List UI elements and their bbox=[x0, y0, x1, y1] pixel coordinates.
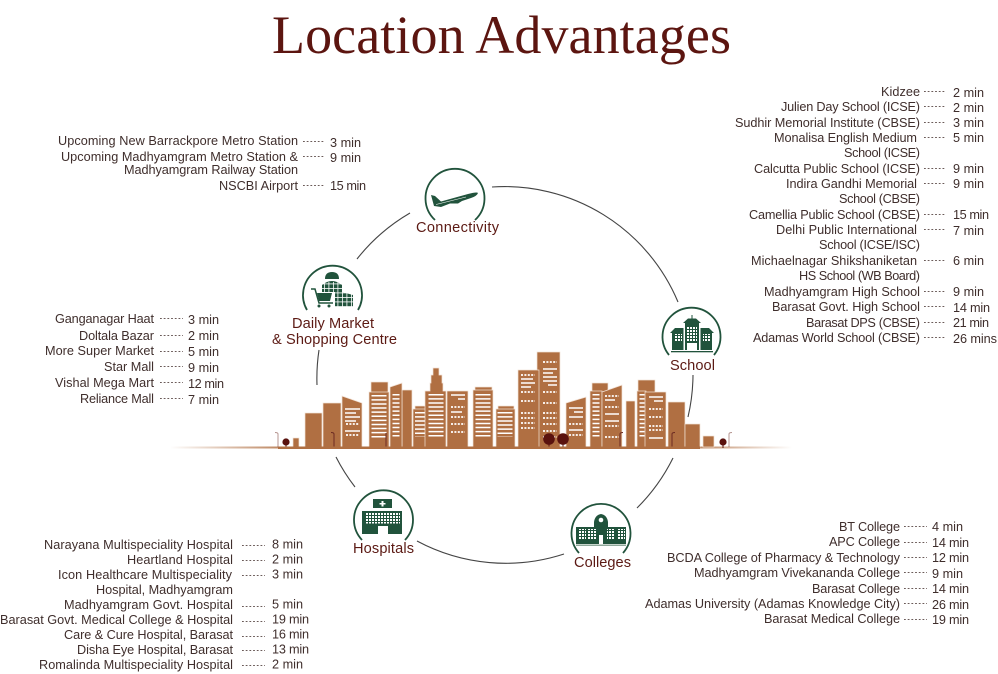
row: indira gandhi: Indira Gandhi Memorial bbox=[786, 177, 917, 191]
row: vivekananda: 9 min bbox=[932, 567, 963, 581]
right buildings bbox=[566, 380, 714, 447]
row: reliance mall bbox=[80, 392, 219, 407]
row: barasat medical: 19 min bbox=[272, 612, 309, 626]
icon: airplane bbox=[431, 192, 478, 207]
ring connectors bbox=[317, 187, 693, 563]
row: adamas university: Adamas University (Adamas Knowledge City) bbox=[645, 597, 900, 611]
row: romalinda: 2 min bbox=[272, 658, 303, 672]
row: delhi public: Delhi Public International bbox=[776, 223, 917, 237]
row: madhyamgram govt bbox=[64, 598, 303, 612]
row: bt college bbox=[839, 520, 963, 534]
row: ganganagar haat bbox=[55, 312, 219, 327]
row: doltala bazar: 2 min bbox=[188, 329, 219, 343]
row: apc college: APC College bbox=[829, 535, 900, 549]
row: care and cure: Care & Cure Hospital, Barasat bbox=[64, 628, 233, 642]
row: monalisa: School (ICSE) bbox=[844, 146, 920, 160]
row: madhyamgram high: 9 min bbox=[953, 285, 984, 299]
row: barasat college: 14 min bbox=[932, 582, 969, 596]
row: barasat medical college: 19 min bbox=[932, 613, 969, 627]
label: Connectivity bbox=[416, 220, 500, 236]
row: ganganagar haat: 3 min bbox=[188, 313, 219, 327]
row: madhyamgram metro: Upcoming Madhyamgram Metro Station & bbox=[61, 150, 299, 164]
row: new barrackpore metro: 3 min bbox=[330, 136, 361, 150]
row: calcutta public: 9 min bbox=[953, 162, 984, 176]
row: disha eye: Disha Eye Hospital, Barasat bbox=[77, 643, 233, 657]
icon: school building bbox=[670, 315, 714, 352]
row: delhi public bbox=[776, 223, 984, 252]
icon ring bbox=[662, 308, 720, 355]
row: michaelnagar: 6 min bbox=[953, 254, 984, 268]
row: monalisa: Monalisa English Medium bbox=[774, 131, 917, 145]
row: sudhir memorial: Sudhir Memorial Institute (CBSE) bbox=[735, 116, 920, 130]
row: heartland: 2 min bbox=[272, 552, 303, 566]
list: college distances bbox=[645, 520, 969, 627]
row: indira gandhi: 9 min bbox=[953, 177, 984, 191]
street lamps bbox=[275, 432, 732, 447]
list: hospital distances bbox=[0, 538, 309, 672]
centre towers bbox=[518, 352, 560, 447]
label: Colleges bbox=[574, 555, 631, 571]
row: more super market bbox=[45, 344, 219, 359]
row: adamas world: Adamas World School (CBSE) bbox=[753, 331, 920, 345]
row: airport bbox=[219, 179, 366, 193]
title: Location Advantages bbox=[272, 5, 731, 65]
icon: hospital building bbox=[362, 499, 402, 534]
ground band bbox=[278, 446, 700, 449]
row: barasat medical college bbox=[764, 612, 969, 627]
row: monalisa: 5 min bbox=[953, 131, 984, 145]
row: doltala bazar: Doltala Bazar bbox=[79, 329, 155, 343]
row: bcda college: BCDA College of Pharmacy & Technology bbox=[667, 551, 901, 565]
row: apc college: 14 min bbox=[932, 536, 969, 550]
row: madhyamgram metro: Madhyamgram Railway Station bbox=[124, 163, 298, 177]
row: bt college: BT College bbox=[839, 520, 900, 534]
row: barasat dps bbox=[806, 316, 989, 330]
row: vishal mega mart: 12 min bbox=[188, 377, 224, 391]
row: vishal mega mart bbox=[55, 376, 224, 391]
icon: college building bbox=[576, 514, 626, 546]
row: star mall: Star Mall bbox=[104, 360, 154, 374]
row: barasat dps: 21 min bbox=[953, 316, 989, 330]
list: connectivity distances bbox=[58, 134, 366, 193]
row: new barrackpore metro bbox=[58, 134, 361, 150]
row: reliance mall: Reliance Mall bbox=[80, 392, 154, 406]
node: hospitals bbox=[353, 490, 414, 557]
row: star mall: 9 min bbox=[188, 361, 219, 375]
row: narayana: 8 min bbox=[272, 538, 303, 552]
row: icon healthcare bbox=[58, 568, 303, 597]
row: camellia: 15 min bbox=[953, 208, 989, 222]
label: School bbox=[670, 358, 715, 374]
row: barasat govt high: Barasat Govt. High School bbox=[772, 300, 920, 314]
icon ring bbox=[572, 504, 631, 553]
node: daily market bbox=[272, 266, 397, 348]
row: madhyamgram high: Madhyamgram High School bbox=[764, 285, 920, 299]
row: more super market: 5 min bbox=[188, 345, 219, 359]
list: school distances bbox=[735, 85, 997, 346]
row: madhyamgram govt: Madhyamgram Govt. Hospital bbox=[64, 598, 233, 612]
row: icon healthcare: 3 min bbox=[272, 568, 303, 582]
row: bcda college: 12 min bbox=[932, 551, 969, 565]
row: madhyamgram metro: 9 min bbox=[330, 151, 361, 165]
icon ring bbox=[354, 490, 413, 540]
row: barasat college: Barasat College bbox=[812, 582, 900, 596]
row: madhyamgram metro bbox=[61, 150, 361, 177]
row: airport: NSCBI Airport bbox=[219, 179, 298, 193]
row: indira gandhi bbox=[786, 177, 984, 206]
row: icon healthcare: Icon Healthcare Multispeciality bbox=[58, 568, 233, 582]
row: narayana: Narayana Multispeciality Hospital bbox=[44, 538, 233, 552]
list: daily market distances bbox=[45, 312, 224, 407]
row: care and cure: 16 min bbox=[272, 628, 309, 642]
icon ring bbox=[303, 266, 362, 310]
label: Hospitals bbox=[353, 541, 414, 557]
row: delhi public: School (ICSE/ISC) bbox=[819, 238, 920, 252]
node: colleges bbox=[572, 504, 631, 571]
label: Daily Market bbox=[292, 316, 374, 332]
row: indira gandhi: School (CBSE) bbox=[839, 192, 920, 206]
city skyline bbox=[170, 352, 792, 449]
row: heartland bbox=[127, 552, 303, 567]
icon ring bbox=[426, 169, 484, 220]
row: heartland: Heartland Hospital bbox=[127, 553, 233, 567]
row: julien day bbox=[781, 100, 984, 115]
row: barasat govt high bbox=[772, 300, 990, 315]
row: michaelnagar: Michaelnagar Shikshaniketan bbox=[751, 254, 917, 268]
row: sudhir memorial: 3 min bbox=[953, 116, 984, 130]
row: barasat medical college: Barasat Medical College bbox=[764, 612, 900, 626]
row: disha eye: 13 min bbox=[272, 642, 309, 656]
icon: shopping mall and cart bbox=[310, 272, 353, 308]
row: apc college bbox=[829, 535, 969, 550]
left buildings bbox=[293, 368, 515, 447]
row: doltala bazar bbox=[79, 329, 219, 343]
row: adamas world: 26 mins bbox=[953, 332, 997, 346]
row: romalinda: Romalinda Multispeciality Hospital bbox=[39, 658, 233, 672]
row: barasat medical: Barasat Govt. Medical College & Hospital bbox=[0, 613, 233, 627]
row: bt college: 4 min bbox=[932, 520, 963, 534]
row: julien day: Julien Day School (ICSE) bbox=[781, 100, 920, 114]
row: airport: 15 min bbox=[330, 179, 366, 193]
row: ganganagar haat: Ganganagar Haat bbox=[55, 312, 154, 326]
row: star mall bbox=[104, 360, 219, 375]
row: julien day: 2 min bbox=[953, 101, 984, 115]
row: new barrackpore metro: Upcoming New Barrackpore Metro Station bbox=[58, 134, 298, 148]
row: barasat college bbox=[812, 582, 969, 596]
trees bbox=[282, 433, 727, 448]
row: calcutta public: Calcutta Public School (ICSE) bbox=[754, 162, 920, 176]
row: michaelnagar bbox=[751, 254, 984, 283]
row: madhyamgram govt: 5 min bbox=[272, 598, 303, 612]
row: care and cure bbox=[64, 628, 309, 642]
row: more super market: More Super Market bbox=[45, 344, 154, 358]
row: delhi public: 7 min bbox=[953, 224, 984, 238]
row: adamas world bbox=[753, 331, 997, 346]
node: connectivity bbox=[416, 169, 500, 236]
row: barasat dps: Barasat DPS (CBSE) bbox=[806, 316, 920, 330]
row: kidzee bbox=[881, 85, 984, 100]
row: disha eye bbox=[77, 642, 309, 657]
row: barasat govt high: 14 min bbox=[953, 301, 990, 315]
row: monalisa bbox=[774, 131, 984, 160]
row: icon healthcare: Hospital, Madhyamgram bbox=[96, 583, 233, 597]
row: vishal mega mart: Vishal Mega Mart bbox=[55, 376, 154, 390]
row: kidzee: 2 min bbox=[953, 86, 984, 100]
row: adamas university: 26 min bbox=[932, 598, 969, 612]
row: reliance mall: 7 min bbox=[188, 393, 219, 407]
ground line bbox=[170, 446, 792, 448]
label line two: & Shopping Centre bbox=[272, 332, 397, 348]
row: camellia: Camellia Public School (CBSE) bbox=[749, 208, 920, 222]
row: michaelnagar: HS School (WB Board) bbox=[799, 269, 920, 283]
row: vivekananda: Madhyamgram Vivekananda College bbox=[694, 566, 900, 580]
node: school bbox=[662, 308, 720, 374]
row: kidzee: Kidzee bbox=[881, 85, 920, 99]
